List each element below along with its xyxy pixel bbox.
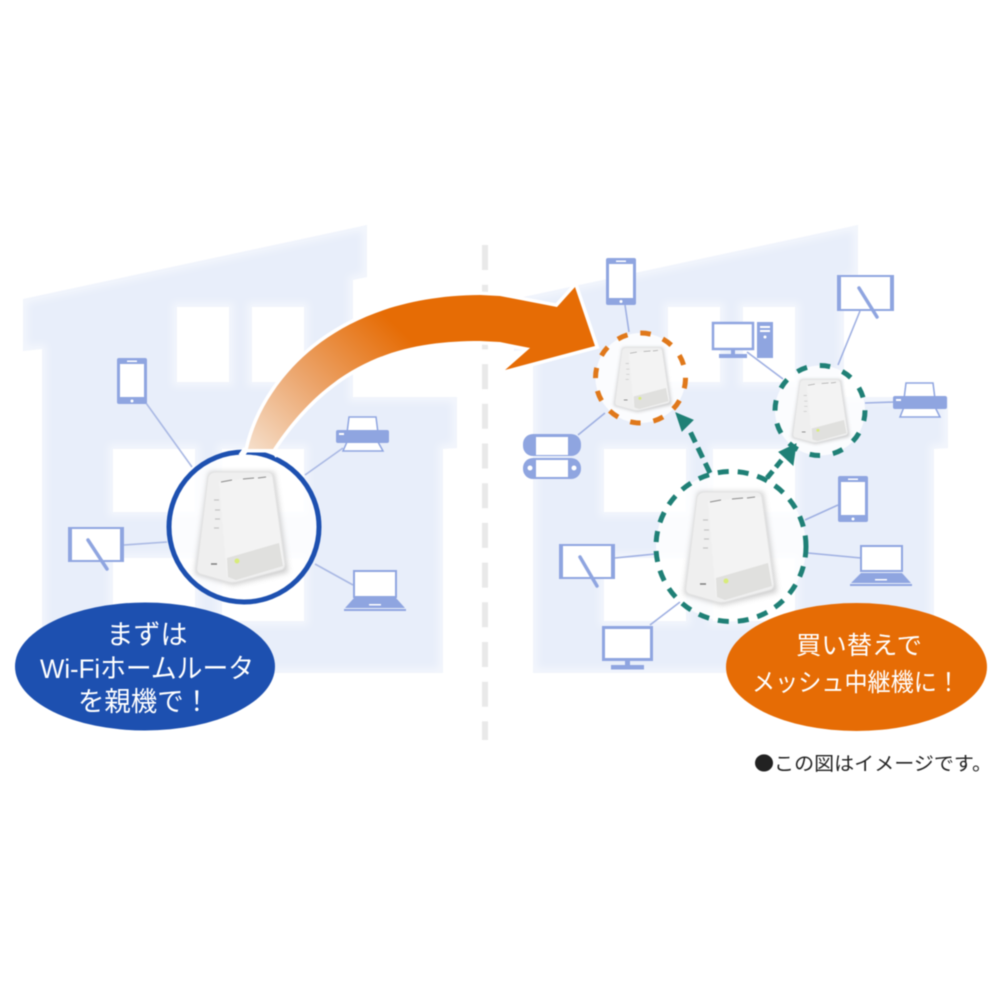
footnote: ●この図はイメージです。 [754,749,992,776]
ring: main router left [169,452,319,602]
callout: right orange ellipse: メッシュ中継機に！ [752,669,960,697]
connection lines: left [124,403,353,585]
ring: teal dashed top [775,366,865,456]
router: right main [684,492,777,605]
divider [482,245,488,740]
arrow: teal to teal router [767,444,796,478]
callout: right orange ellipse [726,603,987,731]
ring: orange dashed [596,333,686,423]
icon: desktop computer [713,322,773,358]
arrow: orange curved [241,287,595,456]
icon: printer right [893,383,947,417]
icon: smartphone right [838,476,868,522]
icon: smartphone left [117,358,147,404]
callout: right orange ellipse: 買い替えで [796,632,922,660]
router: left main [195,472,288,585]
icon: printer left [336,417,389,451]
callout: left blue ellipse: を親機で！ [78,687,210,717]
router: orange mesh [614,348,672,412]
callout: left blue ellipse [15,602,275,730]
house: right [514,225,948,673]
icon: tablet left [68,527,124,569]
icon: tablet top right [837,275,894,317]
connection lines: right [578,305,895,625]
icon: smartphone top [606,258,636,305]
icon: tablet bottom left [559,544,615,586]
icon: game console [523,434,581,479]
ring: teal dashed large [656,472,806,622]
callout: left blue ellipse: Wi-Fiホームルータ [40,654,254,684]
icon: monitor [604,628,652,670]
icon: laptop right [850,546,912,586]
router: teal mesh [792,380,850,444]
house: left [23,225,457,673]
arrow: teal to orange router [676,413,710,473]
icon: laptop left [344,571,406,611]
callout: left blue ellipse: まずは [106,620,188,650]
